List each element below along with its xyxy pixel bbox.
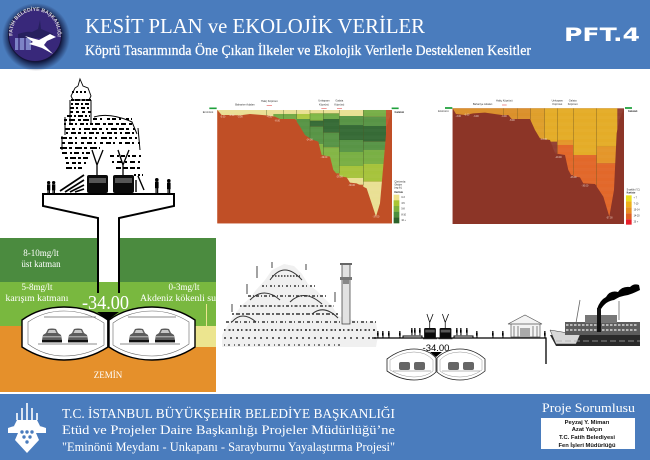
istanbul metropolitan emblem <box>8 403 46 453</box>
oxygen section chart: Eminönü <box>203 110 214 114</box>
depth values: -8.00 <box>275 121 281 123</box>
oxygen section chart: Haliç Köprüsü <box>261 99 278 103</box>
depth values: -37.00 <box>373 216 380 218</box>
salinity section chart: Haliç Köprüsü <box>496 98 513 102</box>
salinity section chart: Unkapanı <box>552 98 563 102</box>
trams on bridge <box>85 150 136 195</box>
mosque sketch <box>222 262 378 347</box>
salinity legend: 14-20 <box>634 216 640 218</box>
footer institution text: T.C. İSTANBUL BÜYÜKŞEHİR BELEDİYE BAŞKANLIĞI <box>62 405 395 422</box>
depth values: -3.00 <box>464 114 470 116</box>
salinity section chart: Köprüsü <box>552 102 563 106</box>
depth values: -3.00 <box>229 115 235 117</box>
salinity legend: Sıcaklık (°C) <box>627 189 640 191</box>
pavilion sketch <box>508 315 542 337</box>
project lead box: Peyzaj Y. Mimarı <box>565 420 610 426</box>
depth values: -4.00 <box>267 117 273 119</box>
strata labels: Akdeniz kökenli su <box>140 293 217 303</box>
strata labels: 8-10mg/lt <box>23 248 59 258</box>
salinity legend: < 7 <box>634 197 638 200</box>
salinity legend: Kartiste <box>627 192 636 195</box>
sheet code: PFT.4 <box>564 24 640 46</box>
small trams <box>423 314 452 339</box>
small tunnels <box>387 349 485 380</box>
water strata section <box>0 238 217 392</box>
depth values: -37.00 <box>606 217 613 219</box>
depth values: -3.00 <box>456 116 462 118</box>
project lead heading: Proje Sorumlusu <box>542 400 636 415</box>
title: KESİT PLAN ve EKOLOJİK VERİLER <box>85 14 425 38</box>
project lead box: T.C. Fatih Belediyesi <box>559 435 615 441</box>
depth values: -14.00 <box>540 139 548 141</box>
salinity section chart: Galata <box>569 98 577 102</box>
depth values: -3.00 <box>237 117 243 119</box>
oxygen legend: Oksijen <box>394 185 403 187</box>
oxygen legend: 10 + <box>401 220 407 222</box>
depth values: -30.00 <box>582 185 589 187</box>
footer institution text <box>62 405 395 454</box>
depth values: -26.00 <box>336 177 343 179</box>
oxygen section chart: Baharive Adaları <box>235 103 255 107</box>
project lead box: Fen İşleri Müdürlüğü <box>558 442 616 449</box>
salinity section chart: Bahariye Adaları <box>473 102 493 106</box>
municipality logo <box>2 4 70 70</box>
bridge cross-section <box>43 193 174 293</box>
strata labels: 0-3mg/lt <box>168 282 200 292</box>
salinity section chart: Galatalı <box>628 109 638 113</box>
depth values: -19.00 <box>321 157 328 159</box>
strata labels: ZEMİN <box>94 370 123 380</box>
oxygen legend: Çözünmüş <box>394 182 406 184</box>
twin tunnels <box>22 307 195 360</box>
oxygen legend: 0-3 <box>401 197 405 199</box>
project lead box: Azat Yalçın <box>572 427 603 433</box>
strata labels <box>6 248 217 380</box>
oxygen section chart: Köprüsü <box>319 102 329 106</box>
depth values: -3.00 <box>220 117 226 119</box>
salinity legend: 10-14 <box>634 210 640 212</box>
small depth label: -34.00 <box>423 343 449 354</box>
depth values: -26.00 <box>570 177 577 179</box>
depth values <box>456 114 613 219</box>
depth values <box>220 115 380 218</box>
oxygen section chart: Galata <box>335 99 344 103</box>
steam ferry <box>550 284 640 346</box>
building sketch <box>60 79 144 192</box>
municipality logo: FATİH BELEDİYE BAŞKANLIĞI <box>8 6 62 37</box>
oxygen section chart <box>203 99 407 223</box>
oxygen legend: (mg /lt.) <box>394 187 402 190</box>
oxygen legend: 8-10 <box>401 214 407 216</box>
oxygen legend: 3-5 <box>401 203 405 205</box>
footer band <box>0 394 650 460</box>
oxygen legend <box>394 182 407 223</box>
depth values: -19.00 <box>555 157 562 159</box>
depth values: -8.00 <box>509 120 515 122</box>
salinity section chart: Köprüsü <box>568 102 578 106</box>
oxygen section chart: Köprüsü <box>334 102 345 106</box>
header band <box>0 0 650 69</box>
depth values: -30.00 <box>348 185 356 187</box>
footer institution text: Etüd ve Projeler Daire Başkanlığı Projeler Müdürlüğü’ne <box>62 422 395 437</box>
pedestrians on bridge <box>47 178 171 195</box>
oxygen legend: Kartiste <box>394 191 404 194</box>
oxygen section chart: Galatalı <box>395 110 404 114</box>
salinity legend: 20 + <box>634 222 639 224</box>
strata labels: üst katman <box>21 259 61 269</box>
project lead box <box>541 418 635 449</box>
depth values: -3.00 <box>473 116 479 118</box>
oxygen section chart: Unkapanı <box>318 99 330 103</box>
small street section <box>372 314 546 380</box>
strata labels: karışım katmanı <box>6 293 69 303</box>
subtitle: Köprü Tasarımında Öne Çıkan İlkeler ve Ekolojik Verilerle Desteklenen Kesitler <box>85 42 531 59</box>
strata labels: 5-8mg/lt <box>22 282 53 292</box>
salinity section chart <box>438 98 640 225</box>
depth label: -34.00 <box>82 292 129 314</box>
depth values: -4.00 <box>501 116 507 118</box>
salinity legend <box>626 189 640 225</box>
seabed terrain <box>453 108 624 224</box>
seabed terrain <box>217 110 392 223</box>
footer institution text: "Eminönü Meydanı - Unkapanı - Sarayburnu Yayalaştırma Projesi" <box>62 440 395 454</box>
salinity legend: 7-10 <box>634 204 639 206</box>
oxygen legend: 5-8 <box>401 209 405 211</box>
small pedestrians <box>377 328 546 338</box>
salinity section chart: Eminönü <box>438 109 449 113</box>
depth values: -14.00 <box>306 139 313 141</box>
